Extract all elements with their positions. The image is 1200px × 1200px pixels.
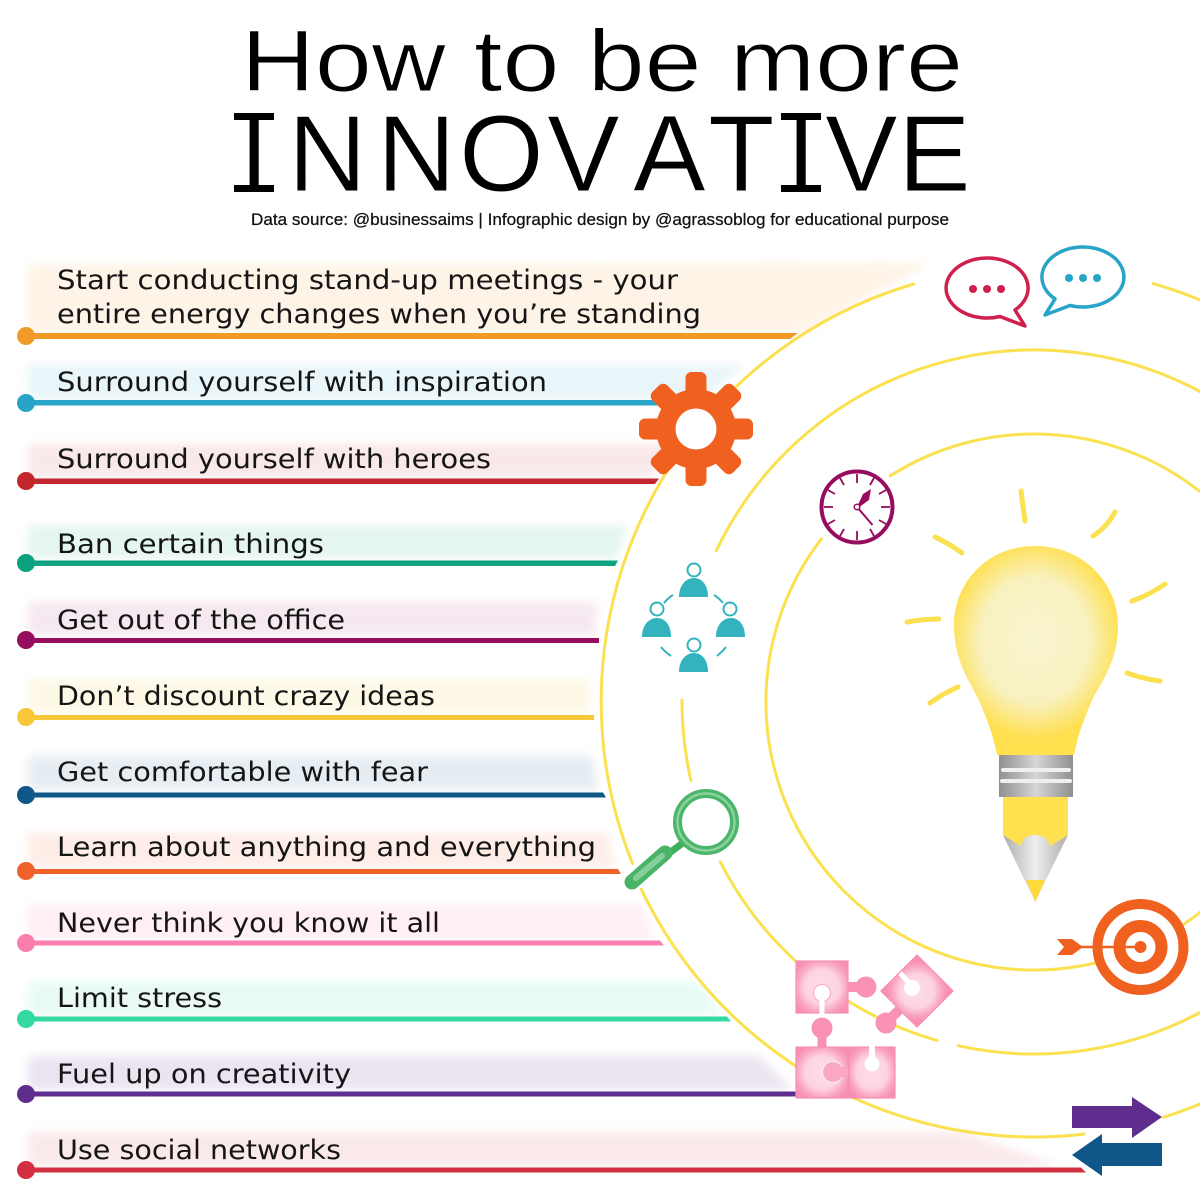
icon: magnifying glass [632, 794, 734, 882]
title line 1: How to be more [241, 13, 963, 110]
row 12: social networks: Use social networks [57, 1135, 341, 1166]
bulb screw base [999, 755, 1073, 797]
puzzle piece bottom right [849, 1046, 895, 1098]
row 1: stand-up meetings: entire energy changes when you’re standing [57, 299, 701, 330]
row 12: social networks [17, 1132, 1086, 1179]
red speech bubble [946, 258, 1028, 326]
row 10: limit stress: Limit stress [57, 983, 222, 1014]
icon: blue arrow left [1072, 1134, 1162, 1176]
row 3: heroes: Surround yourself with heroes [57, 444, 491, 475]
row 2: inspiration: Surround yourself with inspiration [57, 367, 547, 398]
blue speech bubble [1042, 247, 1124, 315]
row 5: out of the office: Get out of the office [57, 605, 345, 636]
icon: people network [642, 564, 745, 672]
pencil body and tip [1003, 797, 1068, 902]
row 4: ban things [17, 525, 627, 572]
row 6: crazy ideas: Don’t discount crazy ideas [57, 681, 435, 712]
row 8: learn [17, 832, 621, 880]
title line 2: INNOVATIVE [239, 93, 971, 215]
icon: clock [822, 472, 892, 542]
row 11: creativity [17, 1056, 798, 1103]
row 1: stand-up meetings: Start conducting stand-up meetings - your [57, 265, 679, 296]
concentric orbit arcs [601, 284, 1200, 1137]
row 1: stand-up meetings [17, 263, 930, 345]
bulb glass [954, 546, 1118, 755]
puzzle piece top left [796, 961, 876, 1014]
icon: puzzle pieces [796, 955, 953, 1098]
row 9: know it all: Never think you know it all [57, 908, 440, 939]
bulb rays [907, 491, 1165, 703]
icon: gear [639, 372, 753, 486]
row 4: ban things: Ban certain things [57, 529, 324, 560]
row 7: fear [17, 756, 606, 804]
row 7: fear: Get comfortable with fear [57, 757, 429, 788]
row 5: out of the office [17, 602, 599, 649]
row 2: inspiration [17, 365, 745, 412]
icon: target with arrow [1057, 904, 1184, 990]
row 11: creativity: Fuel up on creativity [57, 1059, 351, 1090]
row 3: heroes [17, 444, 672, 490]
row 9: know it all [17, 905, 664, 952]
icon: speech bubbles [946, 247, 1124, 326]
row 8: learn: Learn about anything and everything [57, 832, 596, 863]
puzzle piece bottom left [796, 1018, 849, 1098]
puzzle piece rotated [876, 955, 953, 1034]
row 6: crazy ideas [17, 679, 594, 726]
icon: purple arrow right [1072, 1097, 1162, 1138]
title [234, 13, 971, 215]
icon: light bulb pencil [907, 491, 1165, 902]
row 10: limit stress [17, 981, 731, 1028]
data source line: Data source: @businessaims | Infographic design by @agrassoblog for educational purpose [251, 210, 949, 229]
